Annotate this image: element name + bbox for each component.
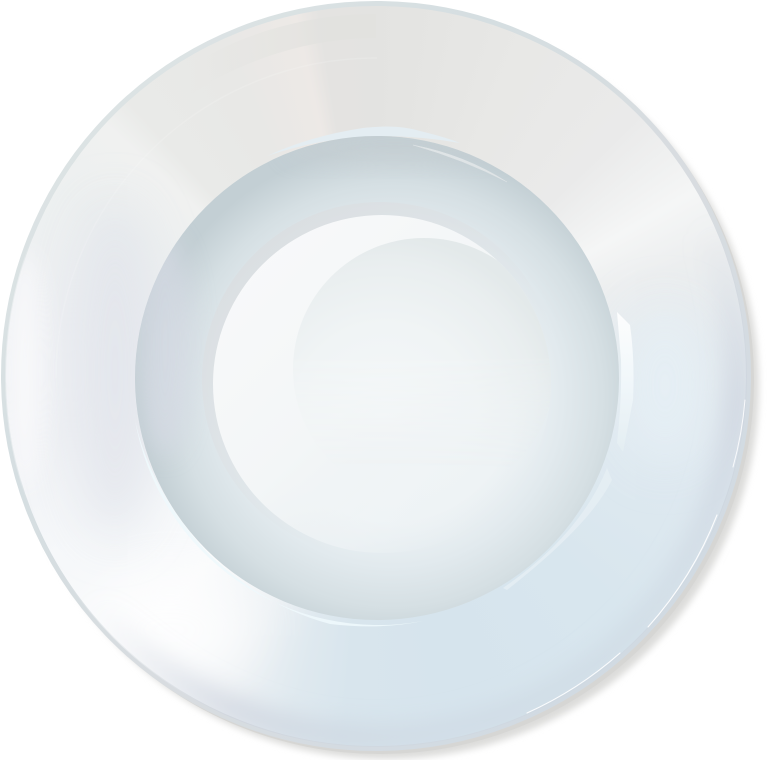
- centre halo: [202, 202, 558, 558]
- lower right lip: [503, 468, 612, 590]
- well lip glints: [135, 127, 634, 626]
- centre disc: [213, 215, 551, 553]
- left inner shade: [80, 245, 150, 524]
- top lip: [267, 127, 460, 156]
- right blue sheen: [620, 305, 710, 465]
- upper outer band: [170, 14, 376, 95]
- plate centre: [213, 215, 496, 541]
- well left tint: [142, 252, 180, 418]
- well top glint: [413, 145, 507, 182]
- well top shade: [285, 134, 505, 162]
- right lip: [617, 312, 634, 452]
- bottom left lip: [135, 420, 423, 626]
- rim shading: [5, 172, 746, 742]
- centre bubble highlight: [296, 238, 549, 358]
- lower left sheen: [86, 607, 176, 688]
- upper left inner arc: [56, 58, 377, 378]
- left outer sheen: [5, 257, 34, 486]
- rim edge glints: [527, 400, 745, 713]
- right dark edge: [130, 316, 746, 742]
- plate well: [135, 134, 619, 620]
